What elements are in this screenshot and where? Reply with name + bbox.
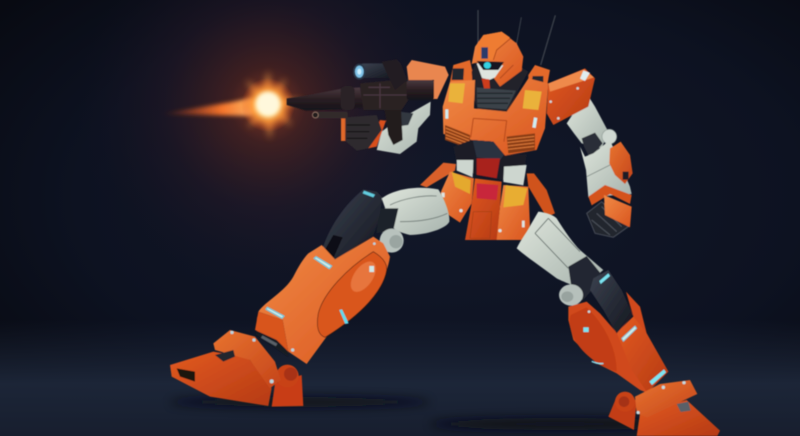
calf <box>568 292 668 393</box>
cuff <box>588 185 632 205</box>
helmet detail line <box>493 38 513 78</box>
muzzle glow on background <box>0 0 520 340</box>
upper body, coordinates scaled from 3x crop <box>287 10 633 240</box>
knee joint <box>380 229 404 253</box>
toe <box>637 400 720 436</box>
skirt rivets <box>441 193 525 232</box>
hand on rifle <box>346 115 382 151</box>
red core <box>477 158 500 178</box>
ankle ring <box>615 392 635 412</box>
forearm guard <box>609 142 633 184</box>
thigh panel line <box>535 218 580 268</box>
wrist dark joint <box>397 112 413 127</box>
waist <box>453 140 527 185</box>
foot rivets <box>588 310 686 414</box>
supporting forearm <box>377 102 431 154</box>
shin side <box>255 312 288 352</box>
skirt armor <box>436 172 530 240</box>
shin face <box>617 317 668 393</box>
instep strap <box>677 402 691 412</box>
torso <box>443 60 550 156</box>
thigh dark gap <box>377 208 398 233</box>
foot rivets <box>230 242 376 383</box>
forearm <box>580 140 632 197</box>
right skirt <box>496 185 530 240</box>
helmet crest <box>477 32 510 60</box>
yellow chest squares <box>448 83 465 103</box>
white waist sides <box>457 160 473 177</box>
left grille <box>445 125 470 149</box>
fist <box>587 202 628 237</box>
dark knee plate <box>590 270 633 333</box>
rear leg <box>517 212 720 436</box>
receiver detail <box>363 83 407 108</box>
knee joint <box>559 284 583 306</box>
receiver <box>360 80 408 110</box>
shin <box>258 237 390 364</box>
arm dark joint <box>582 133 603 158</box>
plate light <box>363 191 375 197</box>
fist knuckle lines <box>592 207 622 235</box>
scope lens <box>353 64 366 80</box>
heel <box>272 375 303 407</box>
head <box>472 32 523 88</box>
shoulder blocks <box>450 60 475 83</box>
waist dark center <box>473 140 504 160</box>
chest main <box>443 78 548 156</box>
antennas <box>478 10 555 65</box>
left yellow plate <box>452 172 471 194</box>
right yellow plate <box>503 185 527 207</box>
instep cover <box>635 380 697 417</box>
right grille <box>507 133 535 153</box>
neck vents <box>477 87 516 109</box>
visor <box>477 61 504 70</box>
panel highlight <box>346 257 381 296</box>
center chest lines <box>471 118 507 142</box>
floor band <box>0 320 800 436</box>
ankle ring <box>276 365 299 387</box>
thigh <box>382 188 449 235</box>
dark knee plate <box>322 189 382 260</box>
front leg <box>170 188 449 407</box>
orange finger guard <box>341 118 345 141</box>
shoulder top face <box>548 69 594 92</box>
far shoulder <box>547 68 595 125</box>
hand finger lines <box>347 125 370 138</box>
barrel <box>287 87 363 111</box>
under-barrel tube <box>312 112 348 118</box>
rifle grip <box>384 103 403 145</box>
floor shadows <box>170 397 690 430</box>
center skirt <box>465 178 502 240</box>
center recess <box>470 212 492 238</box>
instep cover <box>213 330 281 388</box>
left skirt <box>436 172 474 223</box>
forearm line <box>587 163 613 177</box>
calf panel <box>570 307 617 372</box>
plate slot <box>323 235 343 258</box>
thigh seam <box>390 196 447 222</box>
ankle pistons <box>260 328 278 345</box>
far arm <box>547 68 633 237</box>
toe intake <box>177 368 195 382</box>
scope mount <box>382 59 407 90</box>
elbow disc <box>602 129 617 144</box>
face plate <box>477 63 503 80</box>
thumb guard <box>604 195 632 227</box>
upper arm <box>567 93 608 148</box>
scope <box>360 63 393 78</box>
chin <box>482 78 490 88</box>
guard port <box>623 172 629 180</box>
shoulder rivets <box>549 87 579 120</box>
chest lights <box>445 109 448 119</box>
heel <box>608 397 637 430</box>
shoulder light <box>580 71 590 81</box>
cyan shin lights <box>266 257 374 324</box>
barrel collar <box>341 86 355 110</box>
muzzle flash <box>160 70 306 140</box>
right hip tab <box>527 173 555 217</box>
thigh <box>517 212 603 287</box>
near shoulder pad <box>407 60 449 99</box>
instep strap <box>215 350 235 362</box>
knee dark <box>568 256 603 300</box>
center red gem <box>477 183 498 200</box>
left hip tab <box>420 163 456 187</box>
eye <box>484 62 491 69</box>
helmet slot <box>481 47 488 59</box>
rifle and supporting arm <box>287 59 449 154</box>
helmet <box>472 32 523 87</box>
ankle dark <box>257 317 288 357</box>
shin panel <box>317 252 387 337</box>
cyan lights <box>583 273 666 385</box>
collar <box>472 62 528 112</box>
rear cylinder <box>407 80 434 100</box>
wrist orange strip <box>368 120 386 148</box>
toe <box>170 352 272 406</box>
